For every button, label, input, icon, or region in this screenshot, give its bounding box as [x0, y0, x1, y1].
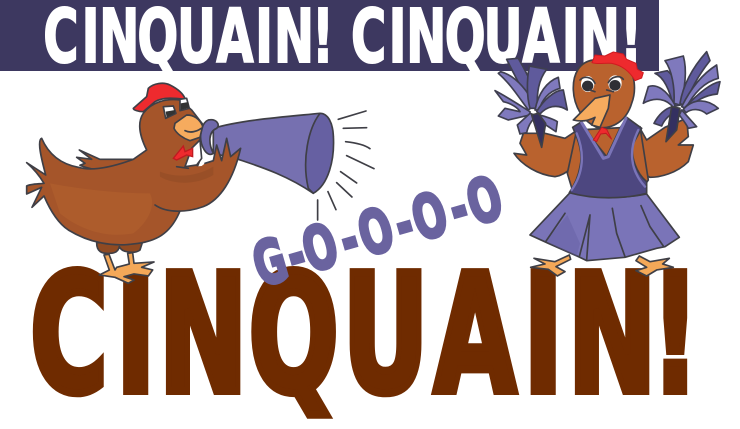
comb [133, 83, 185, 112]
cheer text: G-O-O-O-O [245, 163, 510, 300]
body shading [50, 183, 152, 235]
sound lines [318, 111, 374, 220]
eyes [163, 98, 189, 118]
beak [174, 115, 203, 141]
wattle [173, 146, 193, 160]
wing holding megaphone [155, 138, 241, 211]
left arm [514, 132, 580, 177]
body [27, 100, 203, 245]
head [573, 59, 634, 128]
comb [592, 52, 643, 81]
right pompom [643, 52, 720, 142]
torso [567, 127, 648, 197]
breast [185, 140, 202, 167]
megaphone [201, 113, 334, 193]
small wing feathers [77, 150, 133, 170]
skirt pleats [546, 206, 663, 260]
dress bodice [569, 117, 647, 198]
right arm [632, 118, 693, 177]
feet [531, 255, 673, 276]
left pompom [495, 58, 567, 147]
cheerleader hen [495, 52, 720, 276]
wattle [593, 127, 612, 142]
eyes [580, 75, 623, 92]
dress trim [582, 118, 626, 158]
beak [573, 95, 610, 127]
skirt [530, 193, 679, 261]
hen with megaphone [27, 83, 374, 283]
large heading: CINQUAIN! [30, 240, 699, 429]
legs and feet [97, 242, 154, 283]
